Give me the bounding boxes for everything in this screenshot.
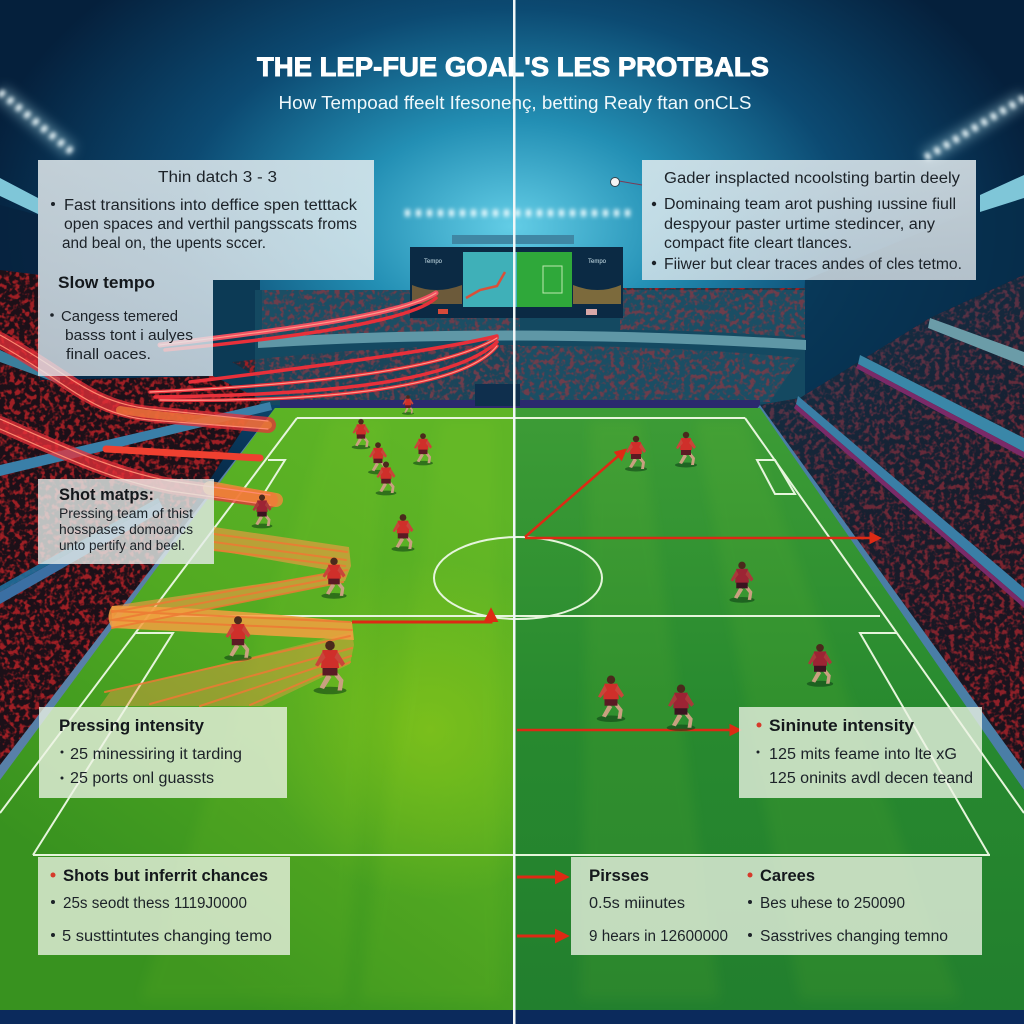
- grass stripes: [140, 420, 960, 1000]
- panel: pirsses and carees: 9 hears in 12600000: [589, 928, 728, 945]
- panel: pressing intensity: Pressing intensity: [59, 717, 205, 735]
- arrow: to pirsses row 2: [517, 934, 565, 938]
- panel: shot matps: unto pertify and beel.: [59, 538, 185, 553]
- panel: pressing intensity: 25 ports onl guassts: [70, 770, 214, 787]
- short trail: [106, 449, 260, 458]
- panel: thin datch: open spaces and verthil pangsscats froms: [64, 216, 357, 233]
- panel: pirsses and carees: [571, 857, 982, 955]
- panel: sininute intensity: 125 mits feame into lte xG: [769, 746, 957, 763]
- big screen: Tempo: [588, 259, 607, 265]
- panel: thin datch: and beal on, the upents sccer.: [62, 235, 266, 252]
- motion trails: [0, 293, 497, 706]
- right stand: [756, 275, 1024, 790]
- panel: shots but inferrit chances: Shots but inferrit chances: [63, 867, 268, 885]
- red arrows: [352, 451, 878, 936]
- bottom band: [0, 1010, 1024, 1024]
- panel: gader insplacted: Fiiwer but clear traces andes of cles tetmo.: [664, 256, 962, 273]
- left team: [224, 395, 433, 694]
- arrow: diagonal: [525, 451, 624, 537]
- title: THE LEP-FUE GOAL'S LES PROTBALS: [257, 52, 769, 82]
- arrow: to pirsses row 1: [517, 876, 565, 878]
- upper trails: [0, 293, 497, 505]
- big screen: Tempo: [424, 259, 443, 265]
- back stand: [232, 288, 806, 408]
- panel: pressing intensity: 25 minessiring it tarding: [70, 746, 242, 763]
- left stand: [0, 270, 283, 800]
- panel: shot matps: Pressing team of thist: [59, 506, 193, 521]
- panel: gader insplacted: compact fite cleart tlances.: [664, 235, 852, 252]
- stadium lights: [0, 92, 1024, 214]
- stadium stands: [0, 190, 1024, 800]
- arrow: long horizontal: [525, 537, 878, 539]
- panel: pirsses and carees: Sasstrives changing temno: [760, 928, 948, 945]
- panel: shot matps: Shot matps:: [59, 486, 154, 504]
- panel: thin datch: Slow tempo: [58, 274, 155, 292]
- panel: pirsses and carees: Pirsses: [589, 867, 649, 885]
- right half of grass: [514, 408, 1024, 1010]
- left half of grass: [0, 408, 514, 1010]
- arrow: to centre circle: [352, 612, 491, 622]
- panel: shot matps: hosspases domoancs: [59, 522, 193, 537]
- arrow: to sininute panel: [517, 729, 738, 731]
- panel: pirsses and carees: Bes uhese to 250090: [760, 895, 905, 912]
- panel: pressing intensity: [39, 707, 287, 798]
- panel: gader insplacted: [610, 160, 976, 280]
- panel: sininute intensity: Sininute intensity: [769, 717, 915, 735]
- panel: gader insplacted: Gader insplacted ncoolsting bartin deely: [664, 170, 960, 187]
- icon: ball with leader: [610, 178, 642, 186]
- panel: shots but inferrit chances: 25s seodt thess 1119J0000: [63, 895, 247, 912]
- panel: thin datch: Cangess temered: [61, 308, 178, 325]
- pitch: [0, 408, 1024, 1010]
- pitch markings: [0, 418, 1024, 855]
- panel: thin datch: [38, 160, 374, 376]
- panel: thin datch: Thin datch 3 - 3: [158, 169, 277, 186]
- orange swirl: [100, 527, 354, 706]
- panel: shot matps: [38, 479, 214, 564]
- panel: thin datch: Fast transitions into deffice spen tetttack: [64, 197, 357, 214]
- panel: sininute intensity: [739, 707, 982, 798]
- panel: shots but inferrit chances: 5 susttintutes changing temo: [62, 928, 272, 945]
- panel: shots but inferrit chances: [38, 857, 290, 955]
- dark side shadows: [0, 190, 1024, 400]
- subtitle: How Tempoad ffeelt Ifesonenç, betting Realy ftan onCLS: [278, 92, 752, 113]
- panel: sininute intensity: 125 oninits avdl decen teand: [769, 770, 973, 787]
- panel: gader insplacted: Dominaing team arot pushing ıussine fiull: [664, 196, 956, 213]
- panel: pirsses and carees: 0.5s miinutes: [589, 895, 685, 912]
- centre divider: [513, 0, 516, 1024]
- right team: [597, 432, 833, 731]
- players: [224, 395, 833, 731]
- panel: gader insplacted: despyour paster urtime stedincer, any: [664, 216, 935, 233]
- panel: pirsses and carees: Carees: [760, 867, 815, 885]
- panel: thin datch: basss tont i aulyes: [65, 327, 193, 344]
- panel: thin datch: finall oaces.: [66, 346, 151, 363]
- big screen: [410, 235, 623, 318]
